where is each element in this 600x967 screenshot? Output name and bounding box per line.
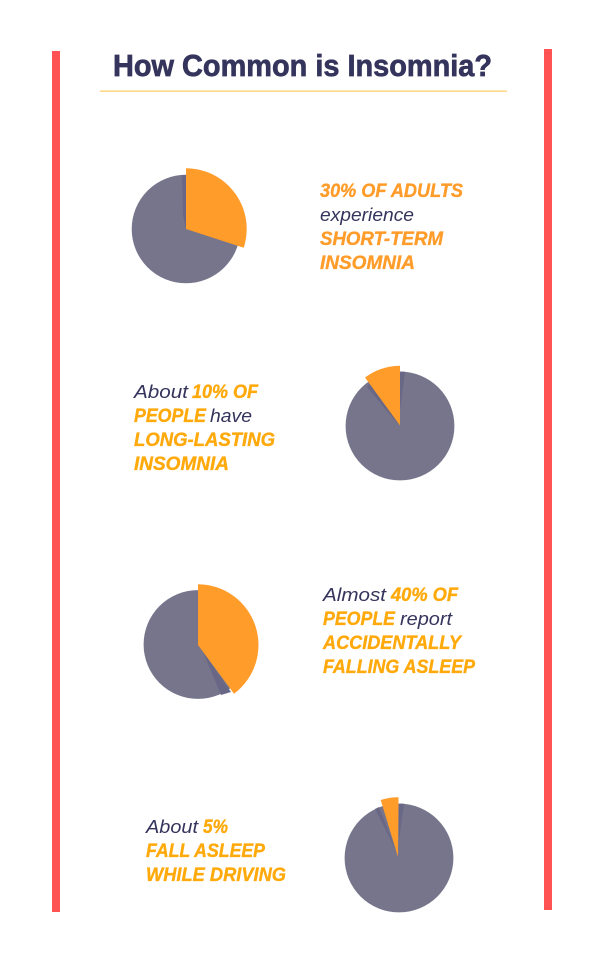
- right red bar: [544, 49, 552, 910]
- text: 30% of adults: experience: [320, 204, 414, 225]
- text: 30% of adults: INSOMNIA: [320, 253, 415, 274]
- text: 10% of people: PEOPLE: [134, 406, 207, 427]
- text: 5% fall asleep while driving: About: [145, 816, 199, 837]
- text: 40% falling asleep: Almost: [322, 584, 387, 605]
- text: 10% of people: INSOMNIA: [134, 454, 229, 475]
- text: 10% of people: have: [210, 405, 252, 426]
- text: 40% falling asleep: report: [400, 608, 453, 629]
- text: 40% falling asleep: 40% OF: [390, 585, 459, 606]
- text: 30% of adults: [320, 181, 463, 274]
- text: 40% falling asleep: PEOPLE: [323, 609, 396, 630]
- pie chart: 5% while driving: [345, 797, 453, 912]
- pie chart: 30% of adults: [132, 168, 247, 283]
- text: 40% falling asleep: ACCIDENTALLY: [322, 633, 463, 654]
- text: 30% of adults: 30% OF ADULTS: [320, 181, 463, 202]
- text: 10% of people: About: [133, 381, 189, 402]
- text: 10% of people: [133, 381, 275, 475]
- text: 5% fall asleep while driving: 5%: [203, 817, 228, 838]
- text: 5% fall asleep while driving: FALL ASLEEP: [146, 841, 265, 862]
- text: 5% fall asleep while driving: [145, 816, 286, 886]
- pie chart: 40% of people: [144, 584, 258, 699]
- text: 40% falling asleep: FALLING ASLEEP: [323, 657, 475, 678]
- text: 5% fall asleep while driving: WHILE DRIVING: [146, 865, 286, 886]
- title: How Common is Insomnia?: [113, 48, 492, 83]
- text: 10% of people: 10% OF: [192, 382, 259, 403]
- text: 30% of adults: SHORT-TERM: [320, 229, 444, 250]
- text: 40% falling asleep: [322, 584, 475, 678]
- title underline: [100, 90, 507, 92]
- left red bar: [52, 51, 60, 912]
- text: 10% of people: LONG-LASTING: [134, 430, 275, 451]
- pie chart: 10% of people: [346, 366, 454, 480]
